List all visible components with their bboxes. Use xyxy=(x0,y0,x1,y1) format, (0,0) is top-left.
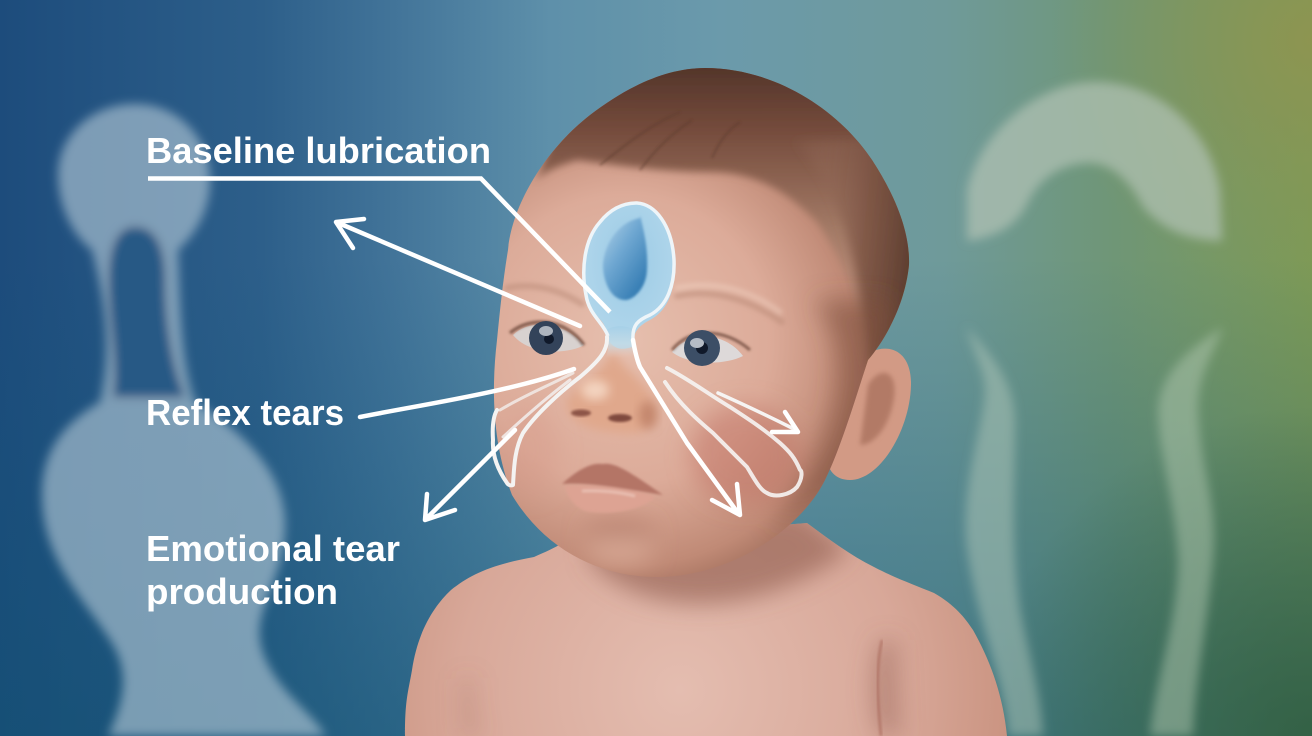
face shading xyxy=(591,290,872,570)
arrow: toward upper left xyxy=(336,219,580,326)
baby body xyxy=(405,523,1007,736)
arrow: down left cheek xyxy=(425,430,515,520)
arrow: down right cheek xyxy=(633,340,740,515)
background silhouette: right spoon shape xyxy=(966,82,1223,736)
flow lines on the left cheek xyxy=(493,337,607,485)
mouth xyxy=(562,464,663,513)
label: reflex tears: Reflex tears xyxy=(146,392,344,433)
right eye xyxy=(672,330,750,366)
teardrop xyxy=(603,215,647,300)
baby hair xyxy=(536,68,910,364)
spoon outline xyxy=(584,203,674,340)
background silhouette: left spoon shape xyxy=(42,104,326,736)
baby body shading xyxy=(460,510,900,736)
brows xyxy=(507,285,782,322)
arrow: right cheek small arrowhead xyxy=(772,412,798,432)
baby head xyxy=(494,68,909,577)
left eye xyxy=(510,321,584,355)
leader line: reflex tears xyxy=(360,369,574,417)
flow lines on the right cheek xyxy=(665,368,802,495)
label: emotional tear production xyxy=(146,528,400,612)
label: baseline lubrication: Baseline lubrication xyxy=(146,130,491,171)
leader line: baseline lubrication xyxy=(148,178,610,312)
label: emotional tear production: production xyxy=(146,571,338,612)
tear gland spoon xyxy=(584,203,675,358)
nose xyxy=(567,350,657,433)
baby ear xyxy=(827,349,911,480)
label: emotional tear production: Emotional tear xyxy=(146,528,400,569)
